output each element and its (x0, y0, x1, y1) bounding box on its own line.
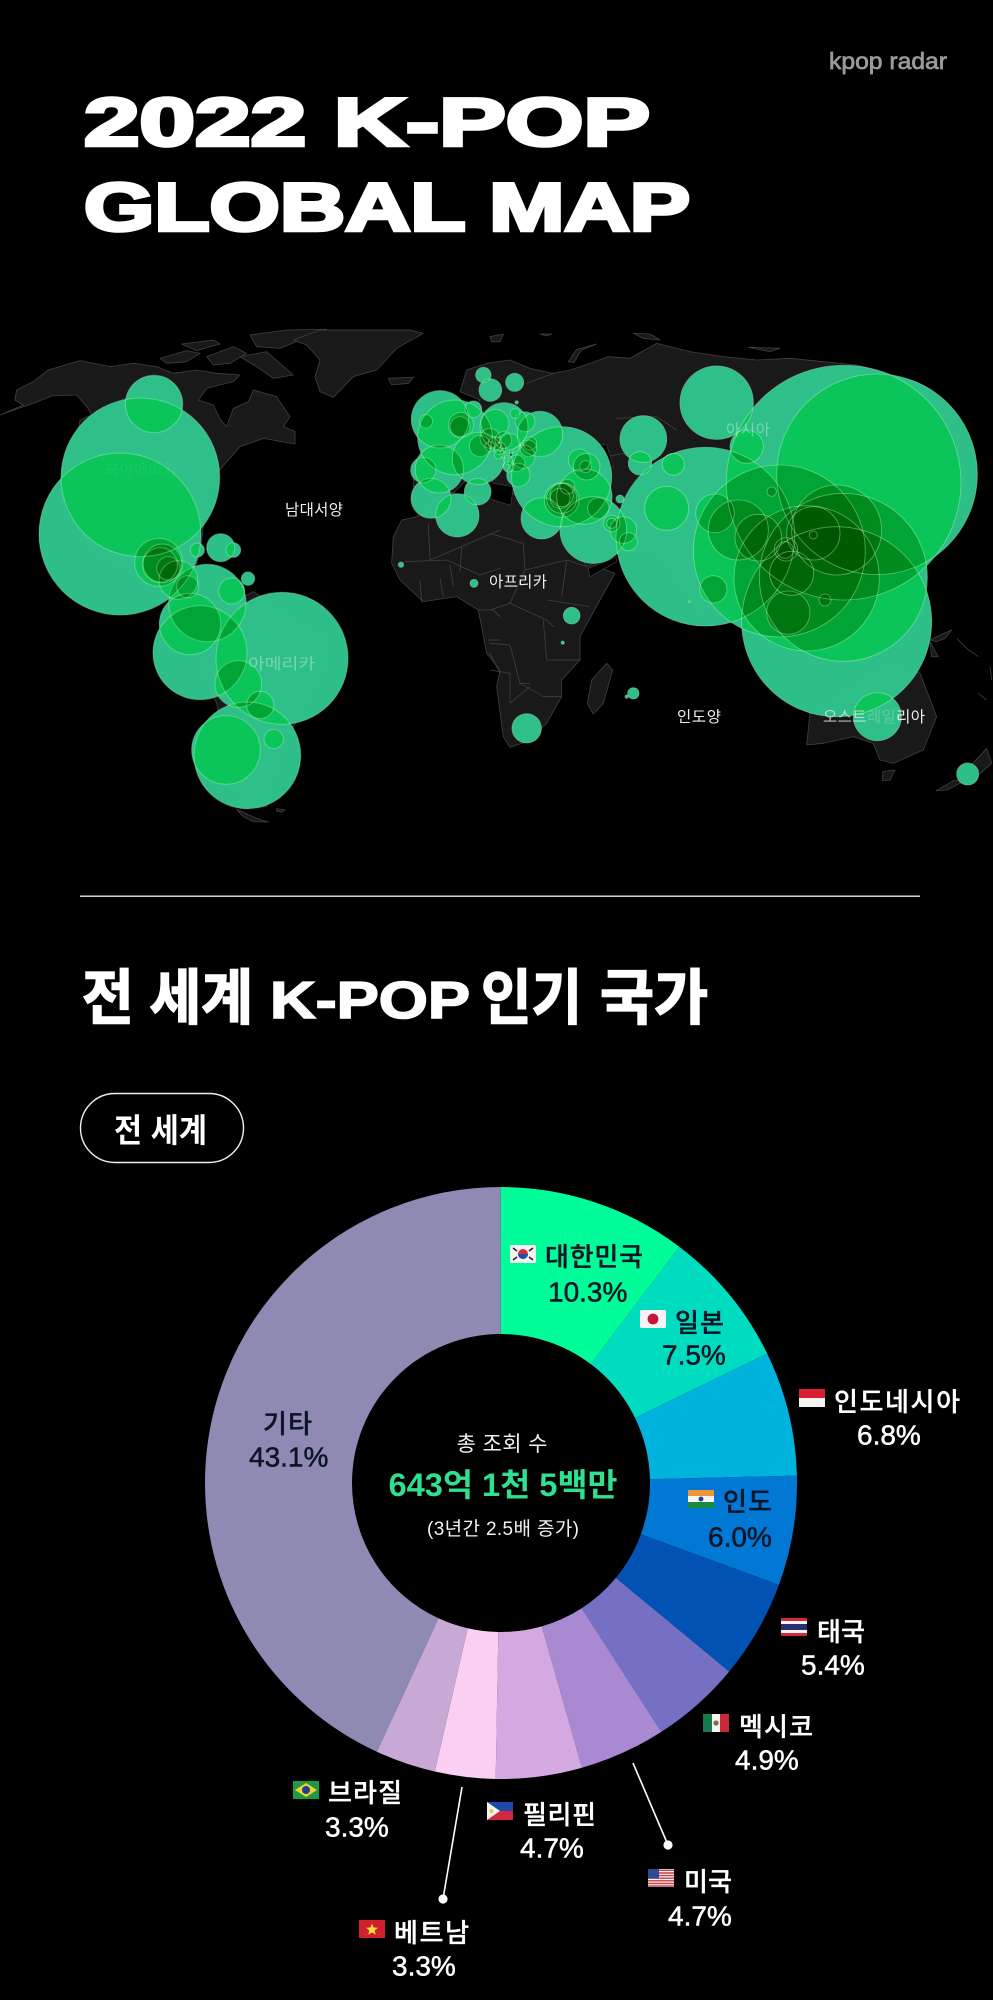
label: 인도네시아 (799, 1382, 960, 1450)
flag: Philippines (487, 1802, 513, 1820)
donut centre text: 643억 1천 5백만 (388, 1467, 618, 1503)
label: 인도네시아: 6.8% (857, 1420, 921, 1450)
label: 미국: 미국 (684, 1862, 732, 1899)
label: 필리핀: 필리핀 (523, 1795, 596, 1832)
label: 기타 (249, 1404, 328, 1472)
label: 기타: 기타 (263, 1404, 312, 1441)
label: 필리핀: 4.7% (520, 1832, 584, 1864)
flag: Thailand (781, 1618, 807, 1636)
filter pill: 전 세계 (80, 1094, 244, 1162)
label: 일본: 일본 (675, 1303, 724, 1340)
bubbles: West Africa (398, 562, 478, 587)
map: bubble outlines (39, 365, 979, 809)
map labels: 인도양 (677, 705, 721, 727)
label: 대한민국: 대한민국 (545, 1237, 643, 1274)
map labels: 아프리카 (489, 570, 547, 592)
label: 기타: 43.1% (249, 1442, 328, 1472)
flag: Brazil (293, 1781, 319, 1799)
flag: Mexico (703, 1714, 729, 1732)
label: 베트남: 3.3% (392, 1950, 456, 1982)
donut centre text: 총 조회 수 (456, 1428, 548, 1458)
label: 인도네시아: 인도네시아 (834, 1382, 960, 1419)
section heading: 전 세계 (82, 950, 253, 1037)
flag: United States (648, 1869, 674, 1887)
map labels (105, 418, 925, 727)
label: 멕시코: 멕시코 (739, 1707, 813, 1744)
label: 태국 (781, 1612, 865, 1680)
donut centre text: (3년간 2.5배 증가) (427, 1518, 579, 1540)
label: 일본 (640, 1303, 726, 1370)
logo: kpop radar: kpop radar (829, 48, 947, 74)
section heading: 국가 (600, 950, 708, 1037)
label: 태국: 태국 (817, 1612, 865, 1649)
title: GLOBAL MAP (84, 170, 690, 246)
label: 멕시코 (703, 1707, 813, 1776)
label: 태국: 5.4% (801, 1650, 865, 1680)
label: 필리핀 (487, 1795, 596, 1864)
map labels: 아시아 (726, 418, 770, 440)
label: 일본: 7.5% (662, 1340, 726, 1370)
label: 대한민국: 10.3% (548, 1276, 627, 1308)
label: 미국 (648, 1862, 732, 1932)
leader line: 베트남 (438, 1787, 462, 1904)
label: 인도 (688, 1482, 772, 1552)
bubbles: Southeast Asia core (688, 465, 927, 661)
donut centre text (388, 1428, 618, 1540)
bubbles: Americas (39, 375, 348, 809)
divider (80, 896, 920, 897)
title (84, 84, 690, 246)
title: 2022 K-POP (84, 84, 650, 160)
map labels: 북아메리카 (105, 458, 177, 480)
bubbles: Europe and North Africa (411, 367, 563, 537)
label: 인도: 6.0% (708, 1522, 772, 1552)
map labels: 오스트레일리아 (823, 705, 925, 727)
map labels: 아메리카 (248, 652, 315, 674)
flag: India (688, 1490, 714, 1508)
label: 베트남: 베트남 (394, 1913, 469, 1950)
section heading (82, 950, 708, 1037)
label: 브라질: 브라질 (328, 1773, 402, 1810)
label: 대한민국 (510, 1237, 643, 1308)
label: 브라질: 3.3% (325, 1812, 389, 1842)
map labels: 남대서양 (285, 498, 343, 520)
leader line: 미국 (633, 1763, 673, 1850)
donut chart (278, 1260, 724, 1706)
section heading: 인기 (481, 950, 582, 1037)
label: 인도: 인도 (723, 1482, 772, 1519)
map: bubble fills (39, 365, 979, 809)
filter pill: 전 세계: 전 세계 (114, 1104, 207, 1152)
flag: Japan (640, 1310, 666, 1328)
label: 베트남 (359, 1913, 469, 1982)
section heading: K-POP (270, 972, 470, 1030)
flag: Vietnam (359, 1920, 385, 1938)
label: 브라질 (293, 1773, 402, 1842)
flag: Indonesia (799, 1389, 825, 1407)
map: inland seas (453, 443, 617, 577)
flag: South Korea (510, 1245, 536, 1263)
label: 미국: 4.7% (668, 1900, 732, 1932)
world map (0, 329, 992, 822)
map: land masses (0, 329, 992, 822)
label: 멕시코: 4.9% (735, 1744, 799, 1776)
bubbles: Middle East, Africa and Asia (512, 365, 979, 785)
